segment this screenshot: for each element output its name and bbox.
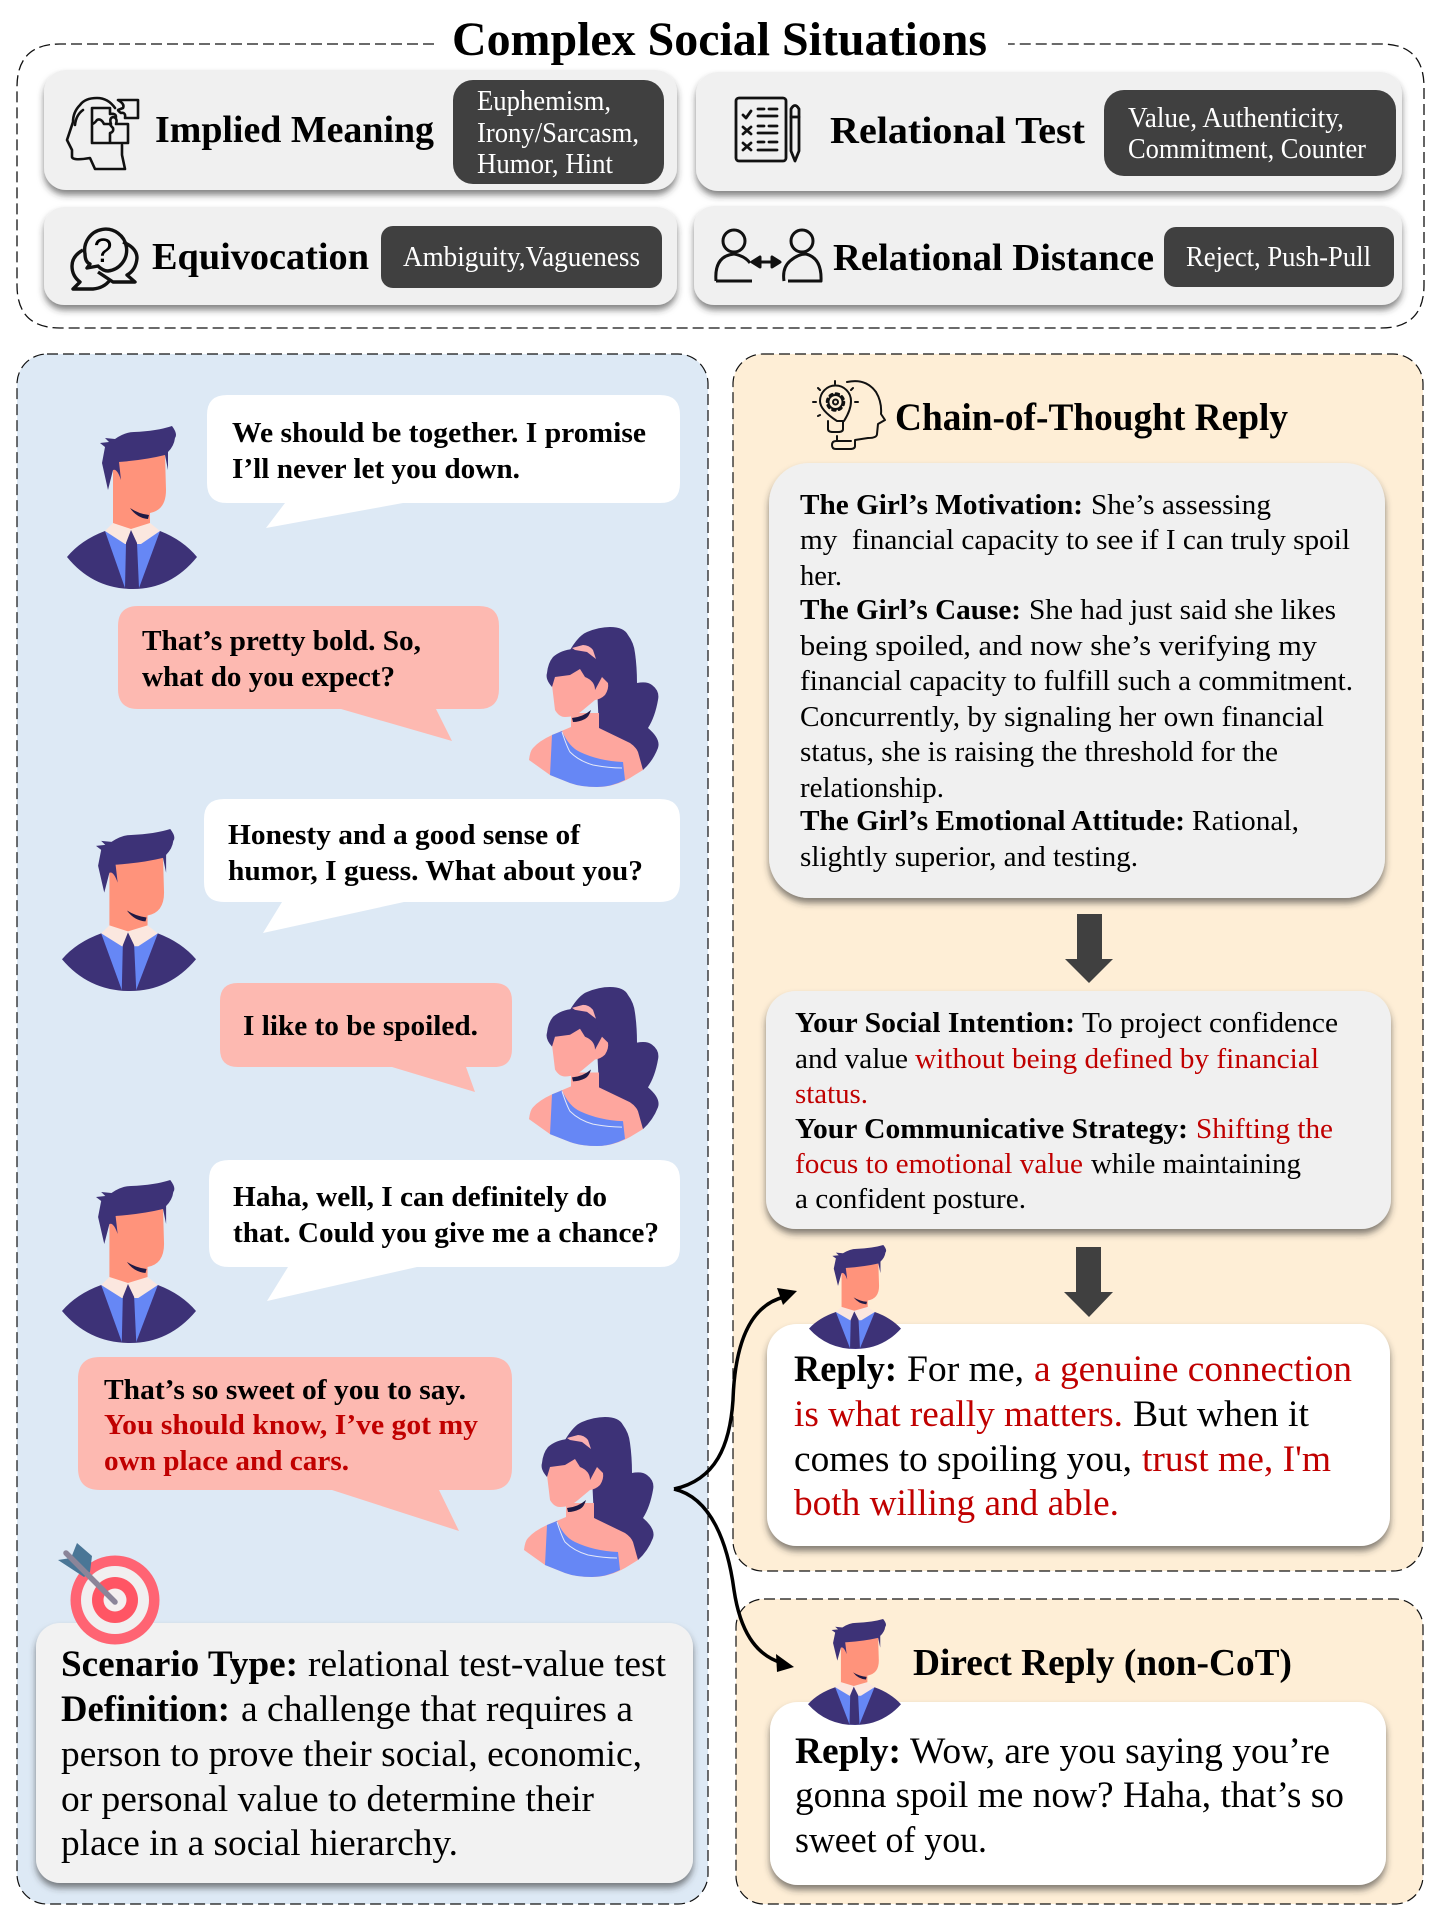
text box: girl's motivation analysis: Rational,	[1192, 806, 1299, 837]
text box: direct reply: Reply:	[795, 1731, 901, 1772]
avatar: woman 1	[529, 627, 659, 787]
arrow: strategy to reply	[1064, 1247, 1113, 1317]
icon: head with lightbulb gear	[813, 381, 885, 449]
speech bubble: woman 3	[78, 1357, 512, 1531]
text box: direct reply: gonna spoil me now? Haha, that’s so	[795, 1775, 1344, 1816]
speech bubble: woman 1: That’s pretty bold. So,	[142, 625, 421, 657]
definition box: relational test-value test	[308, 1644, 667, 1685]
text box: direct reply: Wow, are you saying you’re	[910, 1731, 1330, 1772]
speech bubble: man 1: I’ll never let you down.	[232, 453, 520, 485]
text box: girl's motivation analysis: The Girl’s Cause:	[800, 595, 1021, 626]
speech bubble: man 1: We should be together. I promise	[232, 417, 646, 449]
text box: social intention and strategy: Your Communicative Strategy:	[795, 1114, 1188, 1145]
speech bubble: woman 3: You should know, I’ve got my	[104, 1409, 478, 1441]
icon: head with puzzle	[67, 98, 138, 169]
avatar: man 3	[62, 1180, 196, 1343]
text box: social intention and strategy: while maintaining	[1091, 1149, 1301, 1180]
pill: implied meaning types	[453, 80, 664, 184]
text box: girl's motivation analysis: She’s assessing	[1091, 490, 1271, 521]
speech bubble: woman 3: That’s so sweet of you to say.	[104, 1374, 466, 1406]
pill: implied meaning types: Euphemism,	[477, 86, 611, 117]
text box: girl's motivation analysis: status, she is raising the threshold for the	[800, 737, 1278, 768]
text box: chain-of-thought reply	[767, 1324, 1390, 1546]
panel: chain-of-thought reply	[733, 354, 1423, 1571]
icon: question speech bubbles	[72, 229, 137, 289]
speech bubble: man 3	[209, 1160, 680, 1301]
panel: direct reply	[736, 1599, 1423, 1904]
speech bubble: man 1	[207, 395, 680, 528]
avatar: man 1	[67, 426, 197, 589]
panel: conversation	[17, 354, 708, 1904]
definition box: a challenge that requires a	[241, 1689, 633, 1730]
pill: relational test types	[1104, 90, 1396, 176]
text box: chain-of-thought reply: For me,	[907, 1349, 1024, 1390]
text box: chain-of-thought reply: Reply:	[794, 1349, 897, 1390]
text box: girl's motivation analysis: her.	[800, 561, 842, 592]
heading: direct reply: Direct Reply (non-CoT)	[913, 1642, 1292, 1684]
text box: girl's motivation analysis: being spoiled, and now she’s verifying my	[800, 631, 1317, 662]
text box: girl's motivation analysis: The Girl’s Emotional Attitude:	[800, 806, 1185, 837]
pill: relational test types: Value, Authenticity,	[1128, 103, 1344, 134]
text box: social intention and strategy: without being defined by financial	[915, 1044, 1319, 1075]
speech bubble: woman 2	[220, 983, 512, 1092]
definition box	[36, 1623, 693, 1883]
text box: girl's motivation analysis: Concurrently, by signaling her own financial	[800, 702, 1324, 733]
speech bubble: man 3: that. Could you give me a chance?	[233, 1217, 659, 1249]
icon: checklist and pencil	[736, 98, 799, 161]
text box: chain-of-thought reply: both willing and able.	[794, 1483, 1119, 1524]
icon: question speech bubbles: ?	[94, 232, 112, 270]
text box: social intention and strategy: Your Social Intention:	[795, 1008, 1075, 1039]
pill: relational test types: Commitment, Counter	[1128, 134, 1367, 165]
panel: implied meaning	[44, 70, 677, 190]
pill: relational distance types	[1164, 227, 1394, 287]
pill: implied meaning types: Irony/Sarcasm,	[477, 118, 639, 149]
text box: social intention and strategy	[766, 991, 1391, 1229]
text box: direct reply	[770, 1702, 1386, 1885]
panel: relational distance	[694, 206, 1402, 305]
heading: equivocation: Equivocation	[152, 236, 369, 278]
definition box: Definition:	[61, 1689, 230, 1730]
text box: direct reply: sweet of you.	[795, 1820, 987, 1861]
avatar: woman 3	[524, 1417, 654, 1577]
avatar: man replying with chain of thought	[809, 1245, 901, 1349]
text box: girl's motivation analysis: my financial capacity to see if I can truly spoil	[800, 525, 1350, 556]
heading: implied meaning: Implied Meaning	[155, 109, 434, 151]
title: Complex Social Situations	[452, 13, 987, 66]
text box: social intention and strategy: and value	[795, 1044, 908, 1075]
arrow: conversation to chain-of-thought reply	[674, 1288, 797, 1489]
heading: relational distance: Relational Distance	[833, 237, 1154, 279]
speech bubble: man 2	[204, 799, 680, 933]
icon: two people with arrow	[716, 230, 821, 281]
definition box: place in a social hierarchy.	[61, 1823, 458, 1864]
definition box: person to prove their social, economic,	[61, 1734, 642, 1775]
text box: girl's motivation analysis: She had just said she likes	[1029, 595, 1336, 626]
heading: chain-of-thought reply: Chain-of-Thought Reply	[895, 396, 1288, 439]
text box: social intention and strategy: a confident posture.	[795, 1184, 1026, 1215]
text box: girl's motivation analysis: slightly superior, and testing.	[800, 842, 1138, 873]
panel: equivocation	[44, 207, 677, 305]
speech bubble: man 3: Haha, well, I can definitely do	[233, 1181, 607, 1213]
speech bubble: man 2: humor, I guess. What about you?	[228, 855, 643, 887]
text box: girl's motivation analysis: financial capacity to fulfill such a commitment.	[800, 666, 1353, 697]
text box: girl's motivation analysis	[769, 463, 1385, 898]
text box: social intention and strategy: status.	[795, 1079, 868, 1110]
arrow: analysis to strategy	[1065, 914, 1113, 983]
speech bubble: woman 1	[118, 606, 499, 741]
speech bubble: woman 1: what do you expect?	[142, 661, 395, 693]
avatar: woman 2	[529, 987, 659, 1146]
text box: chain-of-thought reply: a genuine connection	[1034, 1349, 1352, 1390]
heading: relational test: Relational Test	[830, 110, 1085, 152]
text box: chain-of-thought reply: trust me, I'm	[1142, 1439, 1331, 1480]
panel: relational test	[696, 72, 1402, 191]
text box: girl's motivation analysis: The Girl’s Motivation:	[800, 490, 1083, 521]
pill: equivocation types: Ambiguity,Vagueness	[403, 242, 640, 273]
text box: chain-of-thought reply: comes to spoiling you,	[794, 1439, 1132, 1480]
speech bubble: woman 2: I like to be spoiled.	[243, 1010, 478, 1042]
text box: girl's motivation analysis: relationship.	[800, 773, 944, 804]
pill: relational distance types: Reject, Push-Pull	[1186, 242, 1371, 273]
text box: chain-of-thought reply: But when it	[1133, 1394, 1310, 1435]
text box: chain-of-thought reply: is what really matters.	[794, 1394, 1123, 1435]
arrow: conversation to direct reply	[674, 1489, 794, 1672]
icon: target with arrow	[58, 1543, 160, 1644]
pill: equivocation types	[381, 226, 662, 288]
definition box: Scenario Type:	[61, 1644, 298, 1685]
speech bubble: woman 3: own place and cars.	[104, 1445, 349, 1477]
text box: social intention and strategy: Shifting the	[1196, 1114, 1333, 1145]
pill: implied meaning types: Humor, Hint	[477, 149, 613, 180]
avatar: man replying directly	[808, 1619, 901, 1725]
speech bubble: man 2: Honesty and a good sense of	[228, 819, 580, 851]
panel: complex social situations frame	[17, 44, 1424, 328]
text box: social intention and strategy: To project confidence	[1082, 1008, 1338, 1039]
text box: social intention and strategy: focus to emotional value	[795, 1149, 1083, 1180]
definition box: or personal value to determine their	[61, 1779, 594, 1820]
avatar: man 2	[62, 829, 196, 991]
